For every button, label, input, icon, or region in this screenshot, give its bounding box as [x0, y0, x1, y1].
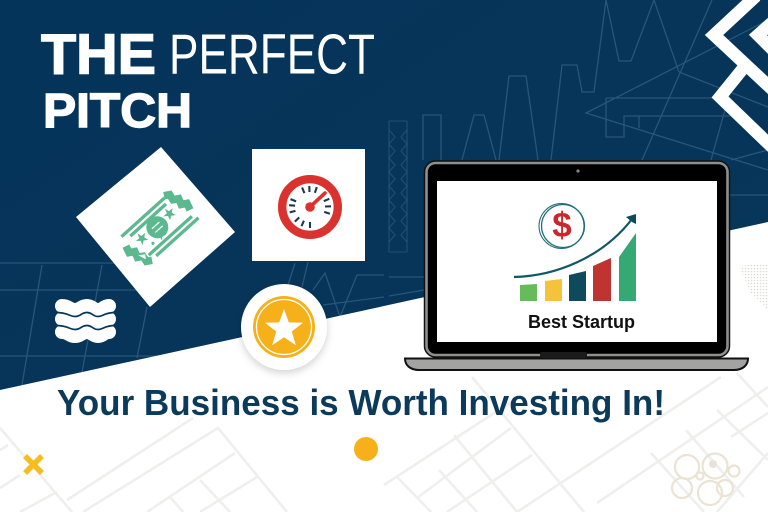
- laptop notch: [540, 352, 587, 358]
- icon: white waves: [55, 306, 116, 336]
- laptop base: [405, 358, 748, 370]
- icon: gold cross: [25, 456, 42, 473]
- bar chart: [520, 233, 636, 301]
- title word: PERFECT: PERFECT: [169, 22, 375, 86]
- title word: PITCH: PITCH: [43, 85, 192, 138]
- gold dot: [354, 437, 378, 461]
- laptop: [405, 161, 748, 370]
- icon: white chevrons top right: [714, 0, 768, 150]
- icon: beige circles cluster: [672, 454, 740, 505]
- dotted texture: [739, 263, 768, 310]
- laptop screen: [437, 181, 717, 342]
- card: money ticket diamond: [76, 147, 235, 307]
- screen label: Best Startup: [528, 312, 635, 332]
- title word: THE: THE: [41, 22, 156, 86]
- card: speedometer: [252, 149, 365, 261]
- dollar badge: $: [552, 206, 572, 245]
- headline: Your Business is Worth Investing In!: [57, 382, 665, 423]
- background: navy skyline and grid lines: [0, 0, 768, 385]
- background: pale street-grid lines: [0, 373, 768, 512]
- background: white lower area: [0, 222, 768, 512]
- icon: green banknote ticket: [116, 188, 200, 268]
- webcam: [576, 169, 580, 173]
- icon: gold star coin: [241, 284, 327, 370]
- laptop lid: [424, 161, 730, 357]
- icon: red gauge: [282, 179, 338, 235]
- title: [41, 22, 375, 138]
- dollar badge: [539, 204, 584, 248]
- growth arrow: [514, 214, 636, 277]
